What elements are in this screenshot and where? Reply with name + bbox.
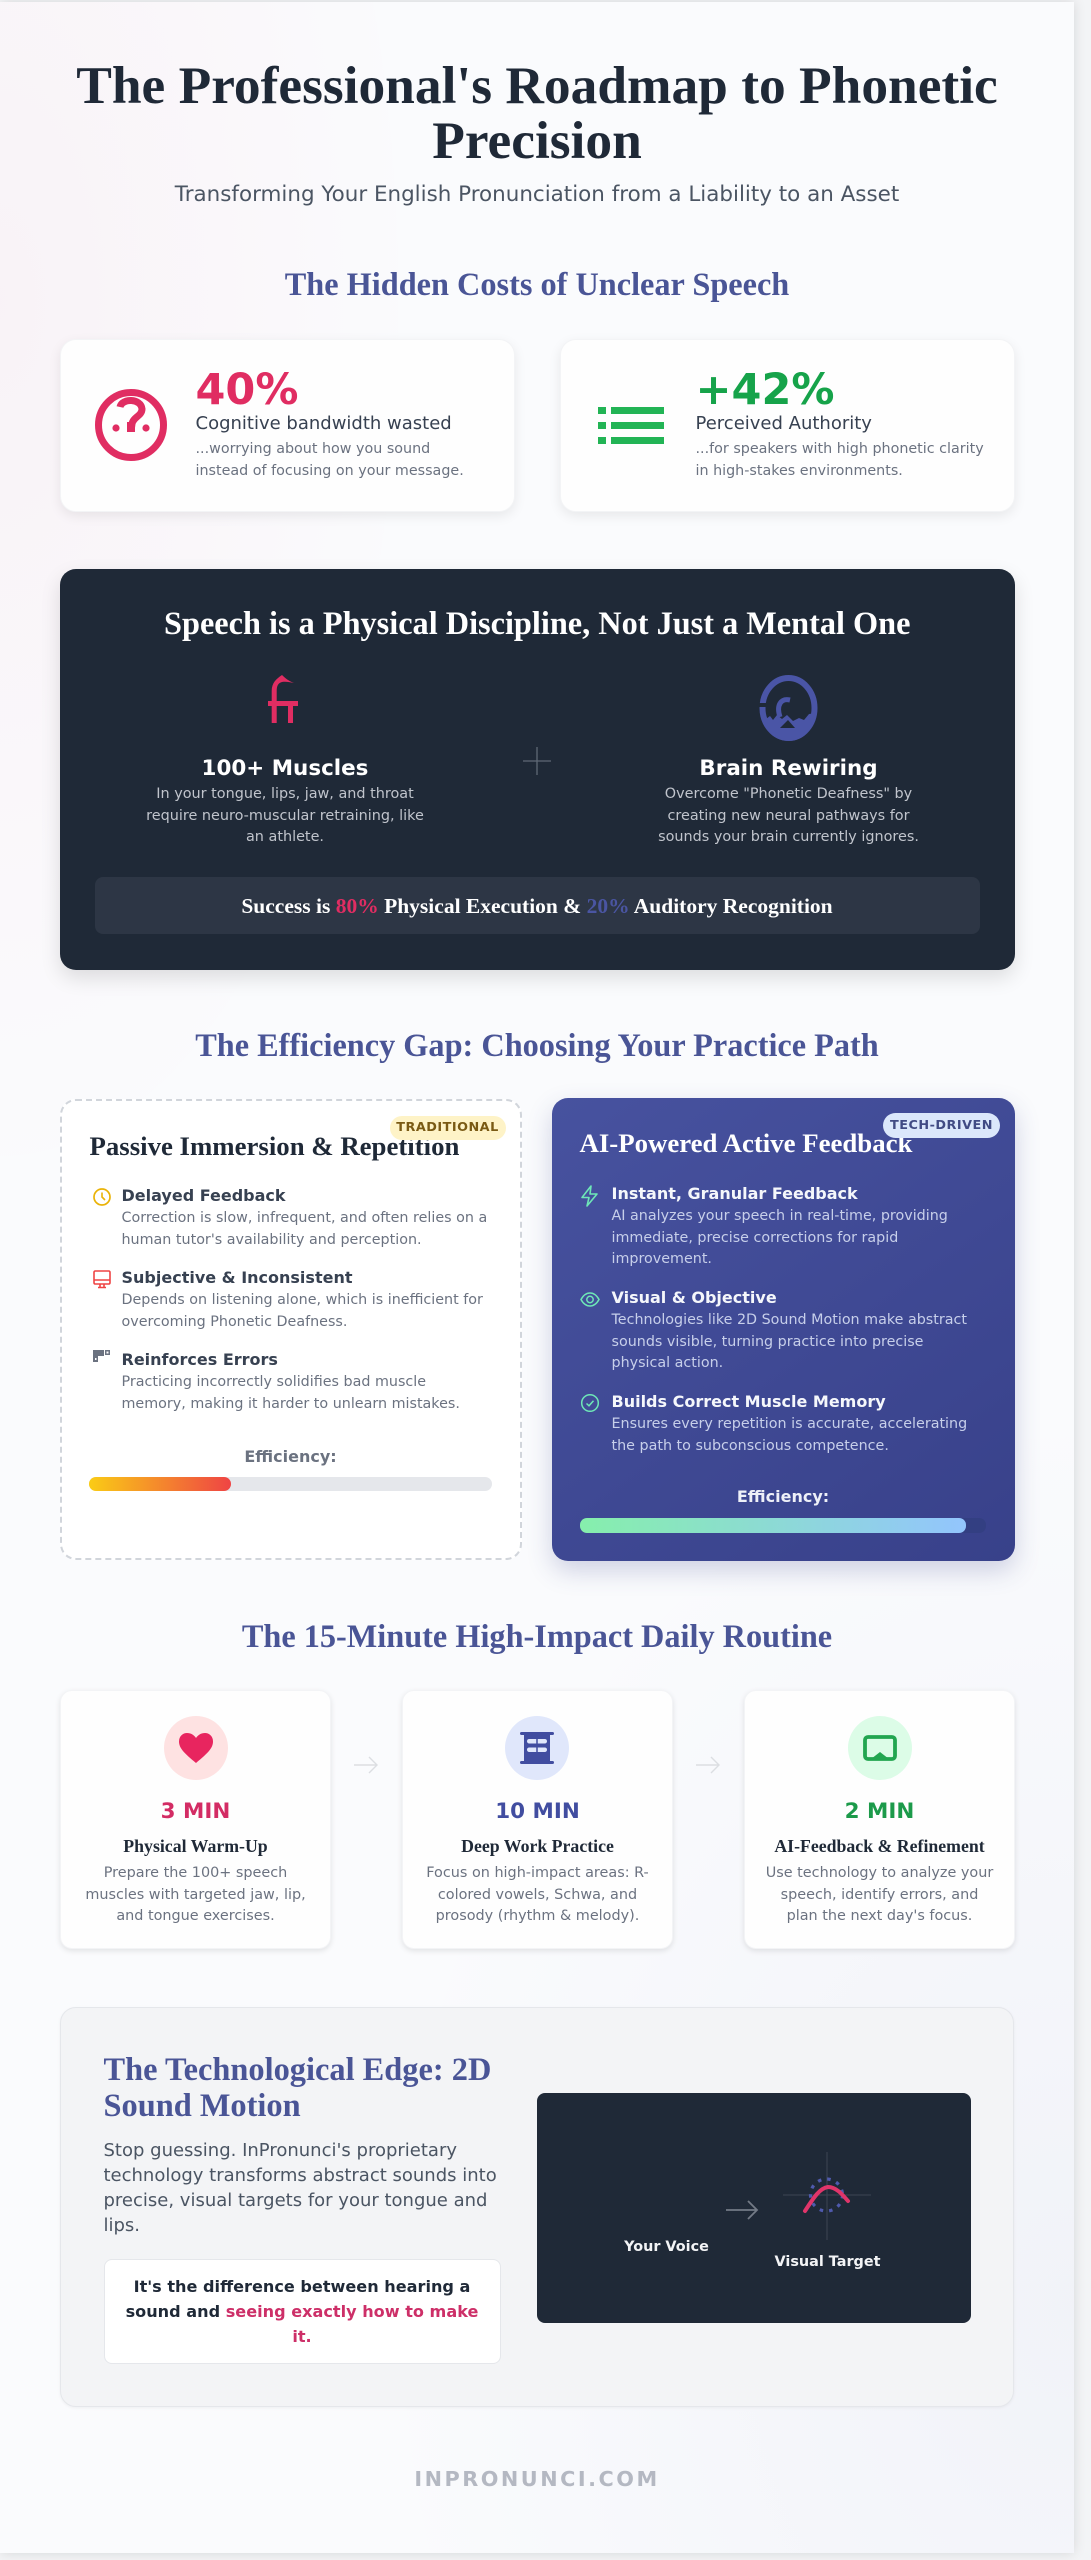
icon: lightning bbox=[581, 1185, 598, 1207]
efficiency bar bbox=[580, 1518, 986, 1533]
stat description: ...for speakers with high phonetic clarity bbox=[696, 441, 984, 457]
panel: AI feedback bbox=[552, 1098, 1015, 1561]
icon: brain bbox=[760, 675, 818, 741]
item: subjective bbox=[93, 1268, 483, 1330]
step duration: 3 MIN bbox=[161, 1799, 230, 1824]
arrow bbox=[354, 1756, 378, 1774]
stat description: in high-stakes environments. bbox=[696, 463, 903, 479]
brain description: sounds your brain currently ignores. bbox=[658, 829, 919, 845]
step text: speech, identify errors, and bbox=[781, 1887, 978, 1903]
brain heading: Brain Rewiring bbox=[699, 756, 878, 781]
success ratio text: Success is 80% Physical Execution & 20% Auditory Recognition bbox=[241, 894, 833, 918]
step text: and tongue exercises. bbox=[116, 1908, 275, 1924]
stat description bbox=[196, 441, 464, 479]
brain description bbox=[658, 786, 919, 845]
muscles description: In your tongue, lips, jaw, and throat bbox=[156, 786, 414, 802]
icon: clock bbox=[93, 1188, 111, 1206]
subtitle: Transforming Your English Pronunciation from a Liability to an Asset bbox=[175, 182, 899, 207]
step duration: 2 MIN bbox=[845, 1799, 914, 1824]
item text: Correction is slow, infrequent, and often relies on a bbox=[122, 1210, 487, 1226]
visual target bbox=[783, 2152, 871, 2240]
step text: Focus on high-impact areas: R- bbox=[426, 1865, 649, 1881]
step card: deep work bbox=[402, 1690, 672, 1949]
icon: bookmark bbox=[848, 1716, 912, 1780]
badge: tech-driven bbox=[883, 1113, 1000, 1138]
label: visual target: Visual Target bbox=[774, 2254, 880, 2270]
panel text bbox=[104, 2140, 497, 2236]
step text bbox=[426, 1865, 649, 1924]
diagram: sound motion bbox=[536, 2093, 970, 2323]
callout text: sound and seeing exactly how to make bbox=[126, 2302, 478, 2321]
label: your voice: Your Voice bbox=[624, 2239, 709, 2255]
brain description: creating new neural pathways for bbox=[667, 808, 910, 824]
item text: human tutor's availability and perception. bbox=[122, 1232, 422, 1248]
icon: list bbox=[598, 407, 664, 444]
icon: monitor bbox=[93, 1270, 111, 1288]
heading: efficiency gap: The Efficiency Gap: Choosing Your Practice Path bbox=[195, 1027, 879, 1063]
item text: AI analyzes your speech in real-time, providing bbox=[612, 1208, 948, 1224]
step title: AI-Feedback & Refinement bbox=[774, 1836, 985, 1856]
stat value: 40% bbox=[196, 365, 298, 415]
icon: eye bbox=[580, 1292, 600, 1307]
step card: AI feedback bbox=[744, 1690, 1015, 1949]
efficiency label: Efficiency: bbox=[244, 1447, 337, 1466]
icon: plus bbox=[523, 747, 551, 775]
panel text: Stop guessing. InPronunci's proprietary bbox=[104, 2140, 457, 2161]
item: delayed feedback bbox=[93, 1186, 487, 1248]
item text: overcoming Phonetic Deafness. bbox=[122, 1314, 347, 1330]
item title: Visual & Objective bbox=[612, 1288, 777, 1307]
item text bbox=[612, 1416, 967, 1454]
badge: tech-driven: TECH-DRIVEN bbox=[890, 1118, 993, 1133]
step card: warm-up bbox=[60, 1690, 330, 1949]
efficiency fill bbox=[88, 1477, 230, 1491]
step text: prosody (rhythm & melody). bbox=[436, 1908, 639, 1924]
item text: physical action. bbox=[612, 1355, 723, 1371]
efficiency bar bbox=[88, 1477, 492, 1491]
panel: passive immersion bbox=[60, 1099, 522, 1560]
panel: perceived authority stat bbox=[560, 339, 1015, 512]
step title: Deep Work Practice bbox=[461, 1836, 614, 1856]
item text: Technologies like 2D Sound Motion make abstract bbox=[612, 1312, 967, 1328]
item: reinforces errors bbox=[93, 1350, 460, 1412]
panel: cognitive bandwidth stat bbox=[60, 339, 515, 512]
item text: the path to subconscious competence. bbox=[612, 1438, 889, 1454]
efficiency fill bbox=[580, 1518, 966, 1533]
item text: Ensures every repetition is accurate, accelerating bbox=[612, 1416, 967, 1432]
heading: hidden costs: The Hidden Costs of Unclear Speech bbox=[285, 266, 789, 302]
title: Precision bbox=[432, 110, 642, 170]
item text bbox=[122, 1292, 483, 1330]
item text: sounds visible, turning practice into precise bbox=[612, 1334, 923, 1350]
item text bbox=[611, 1312, 967, 1371]
panel text: lips. bbox=[104, 2215, 140, 2236]
item title: Delayed Feedback bbox=[122, 1186, 286, 1205]
step text: Prepare the 100+ speech bbox=[104, 1865, 287, 1881]
item: muscle memory bbox=[580, 1392, 967, 1454]
step text: muscles with targeted jaw, lip, bbox=[85, 1887, 306, 1903]
panel heading: Passive Immersion & Repetition bbox=[90, 1131, 459, 1161]
title bbox=[76, 55, 998, 170]
step text: plan the next day's focus. bbox=[787, 1908, 972, 1924]
panel: technological edge bbox=[60, 2007, 1014, 2407]
item title: Reinforces Errors bbox=[122, 1350, 278, 1369]
arrow bbox=[696, 1756, 720, 1774]
title: The Professional's Roadmap to Phonetic bbox=[76, 55, 998, 115]
icon: panel bbox=[505, 1716, 569, 1780]
item text: memory, making it harder to unlearn mistakes. bbox=[122, 1396, 460, 1412]
item title: Builds Correct Muscle Memory bbox=[612, 1392, 886, 1411]
step text: colored vowels, Schwa, and bbox=[438, 1887, 637, 1903]
item text: Depends on listening alone, which is inefficient for bbox=[122, 1292, 483, 1308]
muscles heading: 100+ Muscles bbox=[202, 756, 368, 781]
brain description: Overcome "Phonetic Deafness" by bbox=[665, 786, 912, 802]
icon: check circle bbox=[580, 1394, 599, 1412]
heading: daily routine: The 15-Minute High-Impact Daily Routine bbox=[242, 1618, 832, 1654]
panel heading: The Technological Edge: 2D bbox=[104, 2052, 491, 2088]
arrow bbox=[726, 2200, 758, 2220]
stat value: +42% bbox=[696, 365, 834, 415]
item text: Practicing incorrectly solidifies bad muscle bbox=[122, 1374, 426, 1390]
success ratio bar bbox=[94, 877, 980, 934]
step text bbox=[766, 1865, 994, 1924]
callout text bbox=[126, 2277, 478, 2346]
item text bbox=[122, 1374, 460, 1412]
badge: traditional bbox=[390, 1116, 506, 1140]
item: instant bbox=[581, 1184, 948, 1267]
item title: Instant, Granular Feedback bbox=[612, 1184, 858, 1203]
stat description bbox=[696, 441, 984, 479]
step title: Physical Warm-Up bbox=[123, 1836, 268, 1856]
icon: question face bbox=[95, 389, 167, 461]
icon: heart bbox=[164, 1716, 228, 1780]
step duration: 10 MIN bbox=[495, 1799, 580, 1824]
item text: immediate, precise corrections for rapid bbox=[612, 1230, 898, 1246]
panel heading: Speech is a Physical Discipline, Not Just a Mental One bbox=[164, 605, 910, 641]
muscles description: an athlete. bbox=[246, 829, 324, 845]
icon: muscle bbox=[268, 675, 298, 723]
muscles description: require neuro-muscular retraining, like bbox=[146, 808, 424, 824]
item text: improvement. bbox=[612, 1251, 712, 1267]
step text: Use technology to analyze your bbox=[766, 1865, 993, 1881]
panel heading: AI-Powered Active Feedback bbox=[580, 1128, 912, 1158]
item: visual bbox=[580, 1288, 967, 1371]
stat description: instead of focusing on your message. bbox=[196, 463, 464, 479]
item title: Subjective & Inconsistent bbox=[122, 1268, 352, 1287]
step text bbox=[85, 1865, 306, 1924]
badge: traditional: TRADITIONAL bbox=[396, 1120, 499, 1135]
panel text: precise, visual targets for your tongue and bbox=[104, 2190, 487, 2211]
stat description: ...worrying about how you sound bbox=[196, 441, 430, 457]
panel heading bbox=[104, 2052, 491, 2124]
muscles description bbox=[146, 786, 424, 845]
callout text: it. bbox=[292, 2327, 312, 2346]
efficiency label: Efficiency: bbox=[737, 1487, 829, 1506]
panel heading: Sound Motion bbox=[104, 2088, 301, 2124]
item text bbox=[612, 1208, 948, 1267]
item text bbox=[122, 1210, 487, 1248]
stat label: Cognitive bandwidth wasted bbox=[196, 413, 452, 434]
callout text: It's the difference between hearing a bbox=[134, 2277, 470, 2296]
panel text: technology transforms abstract sounds into bbox=[104, 2165, 497, 2186]
footer: INPRONUNCI.COM bbox=[414, 2467, 660, 2491]
stat label: Perceived Authority bbox=[696, 413, 872, 434]
panel: speech is physical bbox=[60, 569, 1015, 970]
icon: blocks bbox=[93, 1350, 110, 1362]
callout bbox=[104, 2259, 500, 2364]
